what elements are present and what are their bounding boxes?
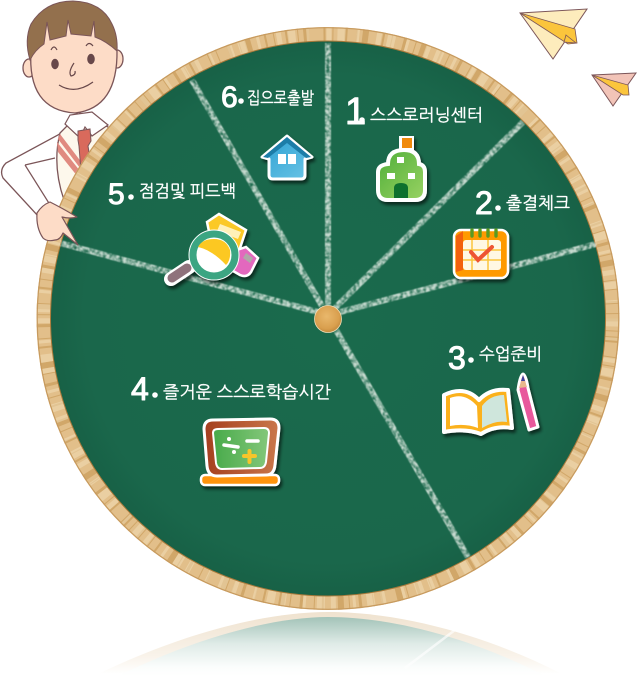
segment 5: review and feedback: 점검및 피드백 [139, 182, 236, 201]
hair [27, 1, 117, 60]
head [31, 12, 117, 113]
icon: pink pencil [518, 374, 538, 430]
face [51, 59, 59, 69]
icon: calendar [454, 230, 508, 278]
paper plane: pink [592, 73, 636, 106]
segment 1: study centre [345, 91, 483, 200]
segment 4: study time: 즐거운 스스로학습시간 [163, 383, 331, 402]
shirt front [57, 112, 110, 205]
segment 2: attendance check [454, 185, 570, 278]
segment 5: review and feedback: 5 [108, 178, 125, 211]
tie [78, 129, 91, 172]
icon: blue house [262, 136, 312, 179]
paper plane: yellow [520, 9, 587, 59]
pointing hand over the frame [37, 202, 78, 245]
segment 5: review and feedback [108, 178, 258, 279]
segment 4: study time [131, 371, 331, 485]
character: boy behind the board [2, 1, 123, 230]
segment 1: study centre: 1 [345, 91, 366, 133]
segment 6: going home: 집으로출발 [247, 89, 314, 108]
chalk dividers [60, 43, 596, 557]
icon: mini blackboard [201, 419, 279, 485]
segment 1: study centre: 스스로러닝센터 [370, 106, 483, 125]
segment 3: class preparation [444, 340, 542, 434]
segment 2: attendance check: 출결체크 [506, 194, 570, 213]
segment 6: going home: 6 [221, 81, 238, 114]
chalkboard wheel [36, 27, 620, 610]
wooden hub [314, 306, 342, 332]
icon: magnifier with notebook and eraser [171, 214, 258, 279]
segment 2: attendance check: 2 [475, 185, 493, 221]
reflection of the board [98, 612, 562, 676]
icon: open book [444, 390, 512, 434]
segment 4: study time: 4 [131, 371, 149, 407]
collar [65, 112, 108, 138]
segment 3: class preparation: 3 [448, 340, 466, 376]
icon: green school [378, 136, 425, 200]
segment 6: going home [221, 81, 314, 179]
green board [50, 41, 606, 596]
sleeve [2, 128, 110, 230]
wooden frame [36, 27, 620, 610]
segment 3: class preparation: 수업준비 [479, 345, 542, 364]
ears [23, 59, 35, 77]
